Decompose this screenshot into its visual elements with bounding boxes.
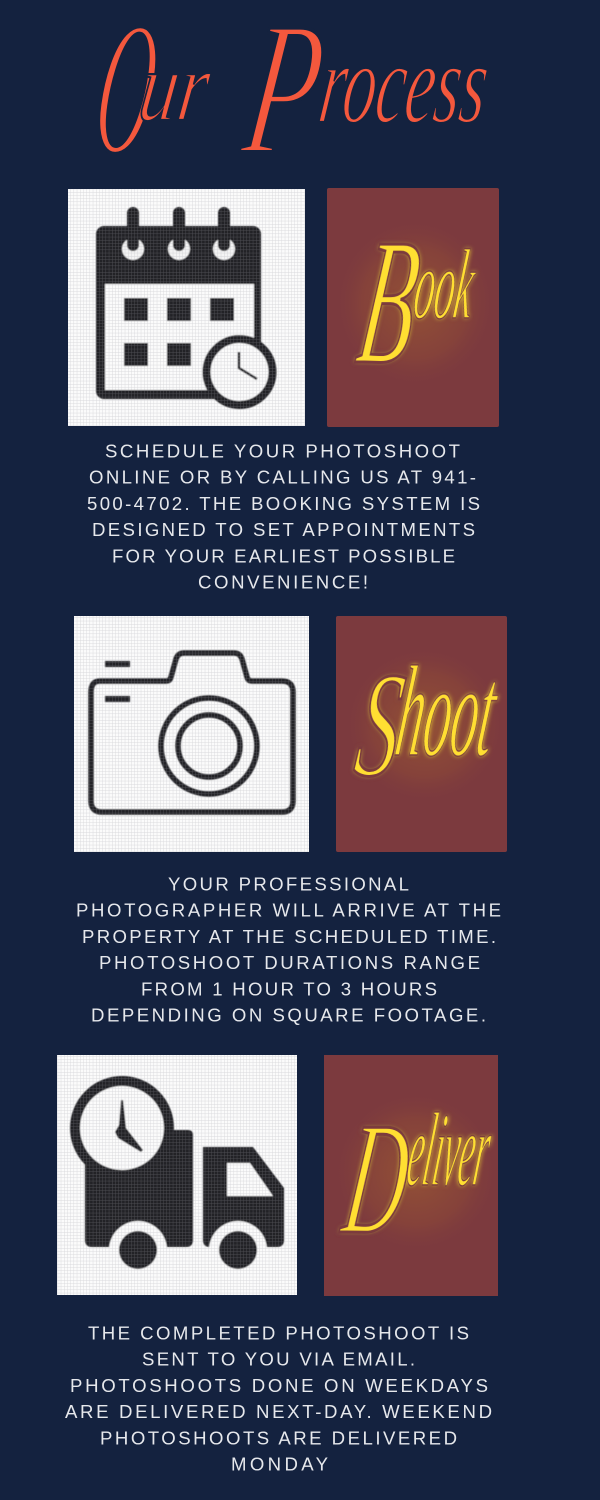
- icon card: truck: [57, 1055, 297, 1295]
- text: deliver description: [65, 1322, 492, 1474]
- title: [84, 0, 502, 194]
- neon card: Shoot: S: [347, 642, 413, 808]
- panel: shoot: [74, 616, 507, 1026]
- panel: deliver: [57, 1055, 500, 1474]
- neon card: Deliver: [324, 1055, 500, 1296]
- text: deliver description: MONDAY: [231, 1454, 328, 1474]
- title: ur: [133, 30, 218, 142]
- neon card: Deliver: D: [334, 1090, 420, 1267]
- neon card: Shoot: [336, 616, 507, 852]
- neon card: Book: ook: [408, 228, 483, 340]
- panel: book: [68, 188, 499, 592]
- text: deliver description: PHOTOSHOOTS DONE ON WEEKDAYS: [70, 1375, 488, 1396]
- text: shoot description: PHOTOGRAPHER WILL ARRIVE AT THE: [76, 900, 501, 921]
- neon card: Book: B: [348, 203, 430, 402]
- text: deliver description: PHOTOSHOOTS ARE DELIVERED: [100, 1427, 457, 1448]
- text: book description: CONVENIENCE!: [198, 572, 368, 592]
- text: book description: DESIGNED TO SET APPOINTMENTS: [92, 519, 475, 540]
- icon card: calendar: [68, 189, 305, 426]
- text: shoot description: DEPENDING ON SQUARE FOOTAGE.: [91, 1004, 486, 1026]
- text: deliver description: SENT TO YOU VIA EMAIL.: [142, 1349, 415, 1370]
- text: book description: [87, 440, 480, 592]
- text: deliver description: ARE DELIVERED NEXT-DAY. WEEKEND: [65, 1401, 492, 1422]
- text: shoot description: FROM 1 HOUR TO 3 HOURS: [141, 978, 437, 999]
- text: shoot description: [76, 874, 501, 1026]
- text: shoot description: YOUR PROFESSIONAL: [168, 874, 409, 894]
- text: book description: 500-4702. THE BOOKING SYSTEM IS: [87, 493, 480, 514]
- text: book description: ONLINE OR BY CALLING US AT 941-: [89, 467, 476, 488]
- icon card: camera: [74, 616, 309, 852]
- text: deliver description: THE COMPLETED PHOTOSHOOT IS: [88, 1322, 469, 1344]
- neon card: Book: [327, 188, 499, 427]
- text: book description: SCHEDULE YOUR PHOTOSHOOT: [105, 440, 460, 462]
- text: book description: FOR YOUR EARLIEST POSSIBLE: [112, 545, 455, 566]
- text: shoot description: PHOTOSHOOT DURATIONS RANGE: [99, 952, 480, 973]
- text: shoot description: PROPERTY AT THE SCHEDULED TIME.: [82, 926, 496, 947]
